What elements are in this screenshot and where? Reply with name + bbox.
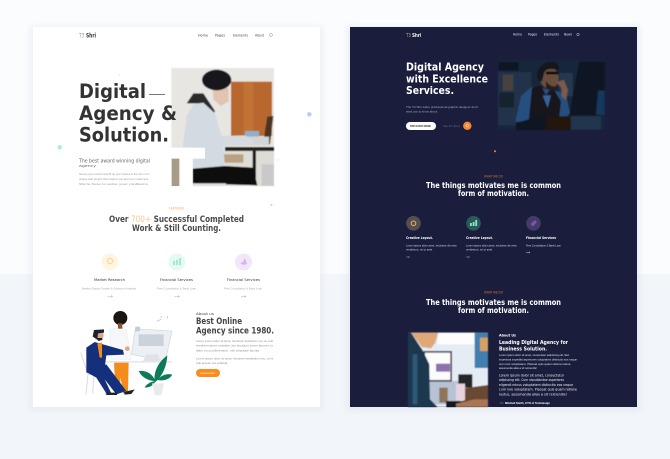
about label: About us: [196, 311, 214, 316]
about paragraph: Lorem ipsum dolor sit amet, hendrerit vestibulum nec, vel a: [196, 356, 273, 360]
about paragraph: Lorem ipsum dolor sit amet, hendrerit vestibulum nec eu velit: [196, 339, 273, 343]
features label: FEATURES: [169, 206, 185, 210]
feature: creative layout one: Creative Layout.: [406, 236, 433, 240]
about intro text: assumenda alias a sit reiciendis!: [499, 366, 537, 370]
hero photo: man at monitor: [498, 60, 605, 130]
hero heading: Services.: [406, 84, 454, 97]
logo: T3 Shri: [405, 33, 421, 39]
hero heading: Agency &: [79, 102, 177, 125]
feature: creative layout one: Lorem ipsum dolor amet, exclusive dis enim: [406, 244, 458, 248]
service: financial services two: Financial Services: [227, 278, 260, 282]
button: learn more: Learn more: [200, 371, 216, 375]
hero heading: Digital Agency: [406, 60, 484, 74]
service: financial services two: [224, 254, 262, 298]
hero heading: with Excellence: [406, 72, 488, 86]
about label: About Us: [499, 334, 516, 338]
about body text: adipiscing elit. Cum repudiandae asperiores: [499, 377, 564, 382]
about heading: Agency since 1980.: [196, 326, 274, 336]
navigation: Elements: [544, 32, 559, 36]
decorative dots: [58, 74, 311, 206]
navigation: [513, 32, 579, 36]
hero heading: Solution.: [79, 124, 169, 146]
button: discover: [406, 122, 436, 130]
section heading repeat: The things motivates me is common: [426, 297, 561, 307]
section heading repeat: form of motivation.: [458, 305, 529, 315]
about heading: Leading Digital Agency for: [499, 340, 568, 346]
service: market research: Market Status Growth & Advance Analysis: [82, 286, 137, 290]
feature: financial services: Financial Services: [526, 236, 556, 240]
about photo: person at desk: [408, 333, 488, 407]
navigation: [198, 34, 272, 38]
feature: creative layout two: [466, 216, 518, 258]
button: discover: DISCOVER MORE: [410, 124, 431, 128]
service: financial services one: Free Consultation & Bank Loan: [157, 286, 196, 290]
about body text: [499, 372, 578, 396]
hero paragraph: unique web project that inspires you and your customers.: [79, 177, 149, 181]
about heading: Best Online: [196, 316, 242, 326]
about paragraph: [196, 339, 273, 365]
hero paragraph: The T3 Shri salon professional graphic designer don't: [406, 105, 478, 109]
navigation: Elements: [233, 34, 248, 38]
service: financial services two: Free Consultation & Bank Loan: [224, 286, 262, 290]
about paragraph: velit aenean nec vehicula.: [196, 361, 228, 365]
hero paragraph: want you to know about.: [406, 110, 438, 114]
about paragraph: hendrerit amet molestie, leo tincidunt lorem laoreet, in: [196, 344, 273, 348]
about body text: iustus, assumenda alias a sit reiciendis!: [499, 392, 567, 396]
feature: financial services: Free Consultation & Bank Loan: [526, 244, 561, 248]
section heading: [426, 180, 561, 198]
logo: T3 Shri: [78, 32, 96, 40]
navigation: Home: [513, 32, 522, 36]
section heading: form of motivation.: [458, 188, 529, 198]
service: market research: Market Research: [94, 278, 125, 282]
hero photo: person at laptop: [170, 68, 274, 189]
features heading: Over 700+ Successful Completed: [109, 215, 244, 225]
about intro text: [499, 353, 577, 370]
features heading: [109, 215, 244, 234]
feature: creative layout two: vendetum, mi ut ante.: [466, 248, 493, 252]
panel: dark template: [350, 27, 637, 407]
navigation: Pages: [528, 32, 537, 36]
hero paragraph: [406, 105, 478, 114]
about intro text: cum iure voluptatem. Placeat quis quam ratione iustus,: [499, 362, 571, 366]
hero heading: [79, 80, 177, 146]
navigation: News: [564, 32, 572, 36]
navigation: Home: [198, 34, 208, 38]
section label repeat: WHAT WE DO: [484, 290, 503, 294]
about body text: eligendi minus voluptatem distinctio eos neque: [499, 382, 573, 387]
feature: creative layout one: [406, 216, 458, 258]
service: financial services one: Financial Services: [160, 278, 193, 282]
video link: [443, 122, 471, 130]
button: learn more: [196, 369, 220, 377]
navigation: Pages: [215, 34, 225, 38]
hero heading: Digital: [79, 80, 146, 103]
feature: creative layout one: vendetum, mi ut ante.: [406, 248, 433, 252]
section heading: The things motivates me is common: [426, 180, 561, 190]
about intro text: Lorem ipsum dolor sit amet, consectetur adipiscing elit. Sed: [499, 353, 569, 357]
hero subheading: The best award winning digital: [78, 158, 150, 164]
hero paragraph: Nexus your product and fill up your wishes in the form of a: [79, 172, 149, 176]
features heading: Work & Still Counting.: [132, 224, 221, 234]
about heading: Business Solution.: [499, 346, 547, 352]
video link: See the Story: [443, 124, 461, 128]
hero paragraph: [79, 172, 149, 186]
panel: light template: [33, 27, 320, 407]
about heading: [499, 340, 568, 352]
about heading: [196, 316, 274, 336]
about intro text: imperiosa expedita asperiores voluptatem distinctio eos neque: [499, 358, 577, 362]
about body text: cum iure voluptatem. Placeat quis quam ratione: [499, 386, 578, 392]
orange dot: [494, 150, 496, 152]
quote attribution: Mitchell Smith, CTO of Techdesign: [505, 401, 550, 405]
hero subheading: [78, 158, 150, 168]
feature: creative layout two: Lorem ipsum dolor amet, exclusive dis enim: [466, 244, 518, 248]
feature: creative layout two: Creative Layout.: [466, 236, 493, 240]
hero heading: [406, 60, 488, 97]
service: financial services one: [157, 254, 196, 298]
illustration: two people at a computer: [81, 311, 172, 395]
hero subheading: agency: [79, 164, 96, 168]
about paragraph: diam eu condimentum, nisl vulputate lacinia.: [196, 348, 260, 352]
section label: WHAT WE DO: [484, 174, 503, 178]
navigation: About: [255, 34, 265, 38]
section heading repeat: [426, 297, 561, 315]
hero paragraph: We're here to solve your problems.: [79, 182, 149, 186]
feature: financial services: [526, 216, 561, 253]
about body text: Lorem ipsum dolor sit amet, consectetur: [499, 372, 564, 378]
service: market research: [82, 254, 137, 298]
